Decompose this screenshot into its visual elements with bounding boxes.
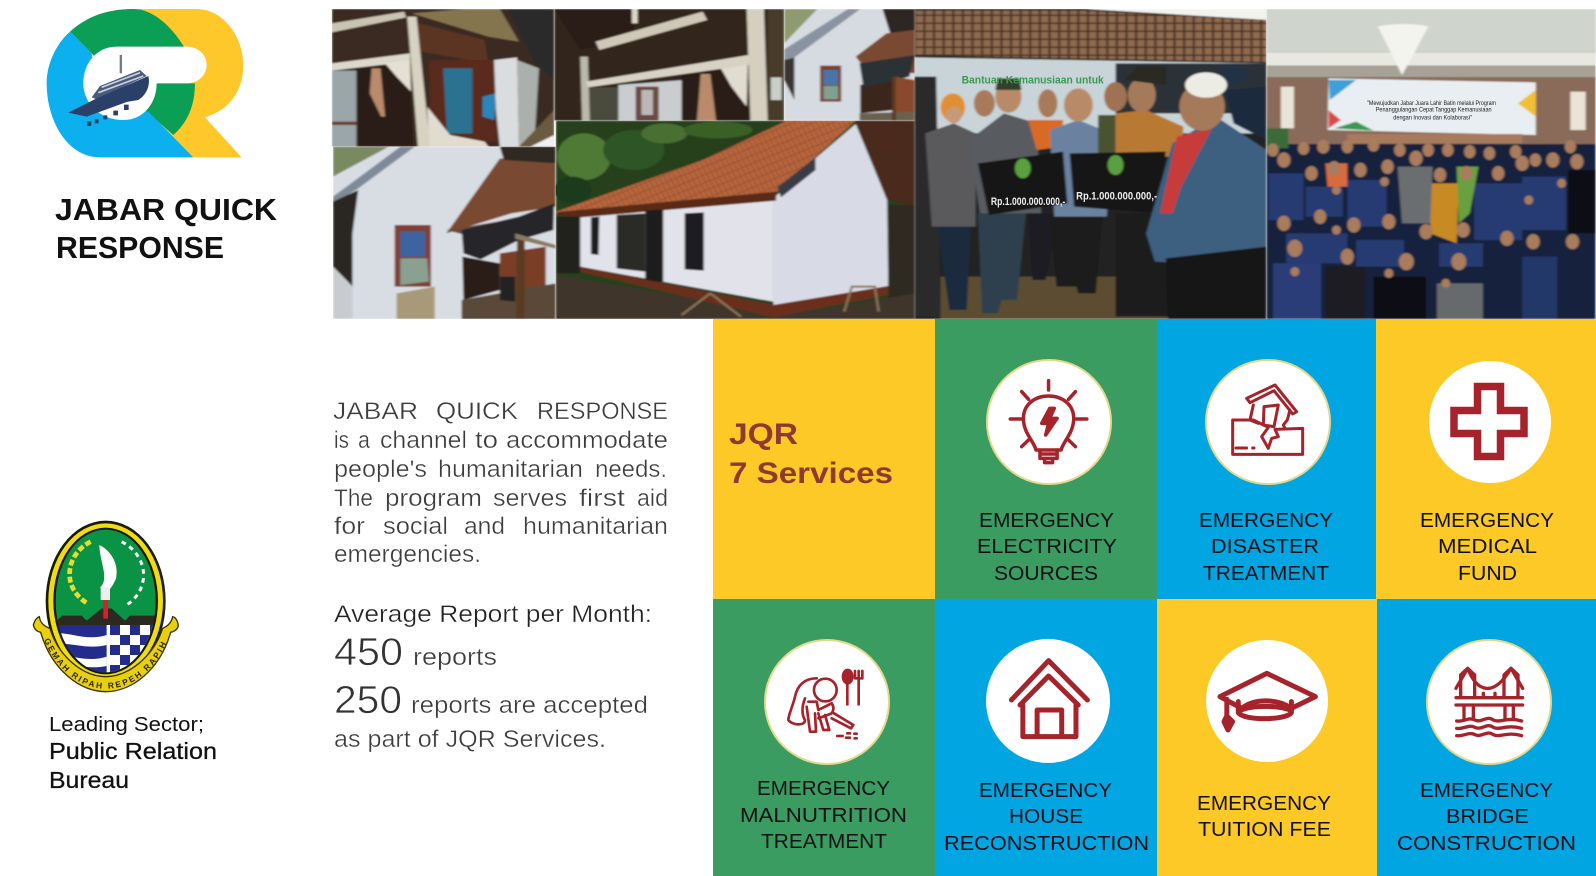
label: FUND [1458, 562, 1517, 585]
panel: emergency bridge construction [1377, 599, 1596, 876]
logo: JQR [47, 9, 243, 157]
text block: description: a [358, 427, 371, 454]
label [977, 509, 1117, 585]
text block: description: JABAR [333, 398, 418, 425]
label: EMERGENCY [1199, 509, 1333, 532]
icon: light bulb [1010, 381, 1087, 463]
text block: description: for [334, 513, 365, 540]
heading: JQR 7 Services [729, 418, 893, 490]
label: DISASTER [1211, 535, 1319, 558]
text block: description: is [334, 427, 349, 454]
photo: aid handover ceremony: Bantuan Kemanusiaan untuk [962, 74, 1104, 86]
text block: description: humanitarian [523, 513, 668, 540]
text block: description: emergencies. [334, 541, 481, 568]
text block: description: and [464, 513, 505, 540]
text: leading sector [49, 713, 217, 793]
label: RECONSTRUCTION [944, 832, 1149, 855]
label: EMERGENCY [757, 777, 890, 800]
photo: damaged house beams [554, 9, 784, 121]
panel: emergency malnutrition treatment [713, 599, 935, 876]
photo: group workshop: "Mewujudkan Jabar Juara Lahir Batin melalui Program [1367, 101, 1496, 107]
stats: average report per month: as part of JQR Services. [334, 726, 606, 753]
label [1199, 509, 1333, 585]
text: leading sector: Leading Sector; [49, 713, 204, 736]
title: Jabar Quick Response [55, 192, 278, 265]
text: leading sector: Public Relation [49, 738, 217, 764]
text block: description: RESPONSE [537, 398, 668, 425]
photo: group workshop: dengan Inovasi dan Kolaborasi" [1393, 115, 1472, 121]
panel: emergency tuition fee [1157, 599, 1377, 876]
text block: description: people's [334, 456, 427, 483]
label: EMERGENCY [1420, 779, 1553, 802]
text: leading sector: Bureau [49, 767, 129, 793]
photo: aid handover ceremony: Rp.1.000.000.000,- [1076, 189, 1157, 202]
icon: graduation cap [1220, 673, 1315, 730]
label [740, 777, 907, 853]
label: HOUSE [1009, 805, 1083, 828]
photo: aid handover ceremony [914, 9, 1266, 319]
text block: description: The [334, 485, 373, 512]
panel: emergency electricity sources [935, 319, 1157, 599]
title: Jabar Quick Response: JABAR QUICK [55, 192, 278, 227]
emblem: West Java coat of arms [32, 520, 179, 692]
text block: description: accommodate [506, 427, 668, 454]
panel: JQR 7 Services [713, 319, 935, 599]
text block: description: aid [637, 485, 668, 512]
icon: bridge [1456, 668, 1523, 736]
stats: average report per month: 250 [334, 679, 402, 722]
photo: group workshop: Penanggulangan Cepat Tanggap Kemanusiaan [1376, 107, 1492, 113]
label: SOURCES [994, 562, 1098, 585]
label: EMERGENCY [979, 509, 1114, 532]
stats: average report per month: Average Report per Month: [334, 601, 652, 628]
text block: description: channel [380, 427, 467, 454]
label: EMERGENCY [1197, 792, 1331, 815]
text block: description: social [383, 513, 448, 540]
label: MALNUTRITION [740, 804, 907, 827]
text block: description: program [385, 485, 482, 512]
photo: damaged house porch [332, 9, 554, 147]
label: ELECTRICITY [977, 535, 1117, 558]
label: MEDICAL [1438, 535, 1537, 558]
text block: description: humanitarian [438, 456, 583, 483]
text block: description: QUICK [436, 398, 518, 425]
emblem: West Java coat of arms: GEMAH RIPAH REPEH RAPIH [45, 638, 166, 689]
icon: collapsed house [1233, 385, 1303, 454]
icon: medical cross [1454, 386, 1524, 456]
panel: emergency disaster treatment [1157, 319, 1376, 599]
stats: average report per month: reports [413, 644, 497, 671]
panel: emergency medical fund [1376, 319, 1596, 599]
stats: average report per month: 450 [334, 631, 403, 674]
text block: description: needs. [595, 456, 667, 483]
label: EMERGENCY [979, 779, 1112, 802]
label: CONSTRUCTION [1397, 832, 1576, 855]
title: Jabar Quick Response: RESPONSE [56, 230, 224, 265]
label: EMERGENCY [1420, 509, 1554, 532]
text block: description: to [475, 427, 498, 454]
stats: average report per month [334, 601, 652, 753]
stats: average report per month: reports are accepted [411, 692, 648, 719]
label: TREATMENT [1203, 562, 1329, 585]
label: TREATMENT [761, 830, 887, 853]
label [1197, 792, 1331, 841]
panel: emergency house reconstruction [935, 599, 1157, 876]
photo: rebuilt house [553, 121, 915, 319]
photo: aid handover ceremony: Rp.1.000.000.000,- [991, 195, 1065, 208]
text block: description [333, 398, 668, 568]
photo: damaged house side small [784, 9, 915, 121]
icon: house [1011, 661, 1087, 737]
heading: JQR 7 Services: JQR [729, 418, 798, 451]
photo: damaged house side large [333, 147, 556, 319]
icon: malnourished person [788, 670, 862, 738]
heading: JQR 7 Services: 7 Services [729, 457, 893, 490]
label: BRIDGE [1446, 805, 1529, 828]
label: TUITION FEE [1198, 818, 1331, 841]
label [1397, 779, 1576, 855]
label [944, 779, 1149, 855]
text block: description: first [579, 485, 625, 512]
photo: group workshop [1266, 9, 1596, 319]
text block: description: serves [493, 485, 567, 512]
label [1420, 509, 1554, 585]
